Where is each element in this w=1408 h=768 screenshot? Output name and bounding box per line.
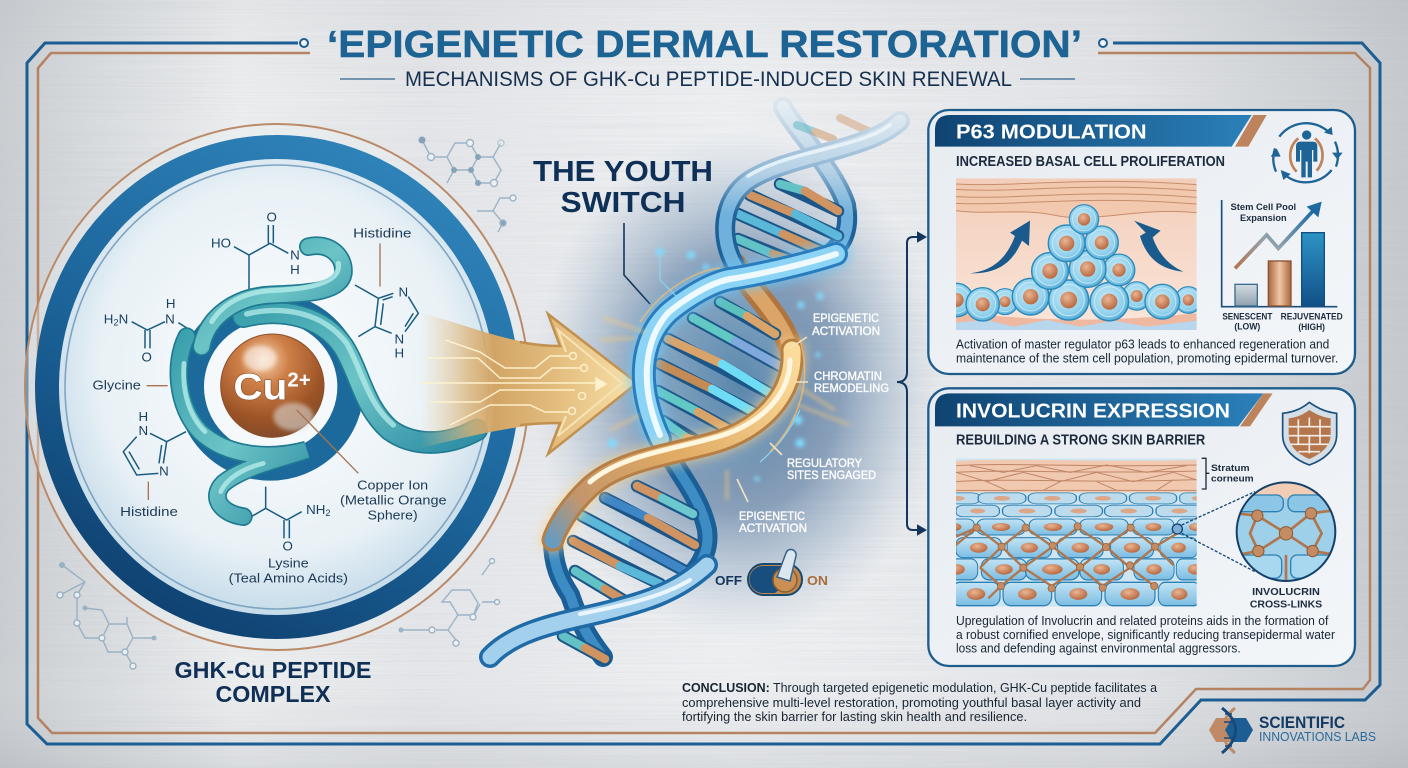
blue ring (47, 147, 507, 627)
bar chart: stem cell pool expansion: Stem Cell Pool (1230, 202, 1296, 212)
bar chart: stem cell pool expansion (1222, 200, 1343, 332)
amino acid labels: Glycine (92, 378, 141, 393)
magnified cross-link view: CROSS-LINKS (1250, 599, 1322, 610)
callout line (624, 223, 650, 304)
teal ribbons (179, 246, 477, 517)
logo: scientific innovations labs: INNOVATIONS LABS (1259, 729, 1376, 744)
conclusion (682, 680, 1158, 724)
amino acid labels: (Metallic Orange (340, 493, 447, 508)
conclusion: fortifying the skin barrier for lasting skin health and resilience. (682, 709, 1027, 724)
panel: involucrin expression (928, 388, 1355, 666)
amino acid labels: Sphere) (368, 507, 418, 522)
icon: off/on toggle switch: ON (807, 573, 828, 588)
amino acid labels: (Teal Amino Acids) (229, 571, 348, 586)
activation labels: ACTIVATION (739, 523, 807, 535)
bonds (123, 225, 418, 538)
energy sparks and dots (600, 248, 850, 500)
illustration: basal cell proliferation (940, 178, 1202, 330)
chemical labels: 2 (325, 508, 331, 518)
activation labels: CHROMATIN (814, 371, 882, 383)
icon: brick shield (1283, 402, 1337, 465)
description: maintenance of the stem cell population, promoting epidermal turnover. (956, 350, 1338, 365)
magnified cross-link view (1182, 482, 1337, 610)
arrow: bracket to panels (897, 233, 925, 534)
chemical labels: H (166, 296, 175, 311)
heading: the youth switch: THE YOUTH (533, 156, 713, 188)
description: Upregulation of Involucrin and related proteins aids in the formation of (956, 613, 1329, 628)
activation labels: REMODELING (814, 383, 889, 395)
amino acid labels: Lysine (268, 556, 309, 571)
chemical labels: N (165, 311, 175, 326)
callout leader lines (147, 243, 380, 500)
copper ion sphere: 2+ (287, 369, 311, 392)
chemical labels: O (141, 350, 152, 365)
subheading: INCREASED BASAL CELL PROLIFERATION (956, 154, 1225, 170)
activation labels (737, 313, 889, 535)
chemical labels (104, 209, 408, 554)
panel: P63 modulation (928, 110, 1355, 374)
amino acid labels: Histidine (353, 226, 411, 241)
activation labels: EPIGENETIC (813, 313, 879, 325)
chemical labels: N (119, 311, 128, 326)
activation labels: ACTIVATION (812, 326, 880, 338)
icon: stem cell cycle person (1271, 123, 1343, 182)
description (956, 613, 1336, 655)
chemical labels: 2 (113, 317, 119, 327)
blue halo behind DNA (533, 130, 943, 640)
amino acid labels: Histidine (120, 504, 178, 519)
growth arrows (970, 221, 1183, 273)
illustration: skin barrier layers (956, 458, 1197, 606)
chemical labels: O (282, 539, 293, 554)
decorative molecule networks (57, 136, 516, 669)
bar chart: stem cell pool expansion: (HIGH) (1298, 322, 1325, 332)
header: P63 MODULATION (956, 121, 1147, 143)
back strands (553, 107, 847, 657)
chemical labels: H (290, 262, 300, 277)
heading: the youth switch: SWITCH (560, 187, 686, 219)
activation labels: EPIGENETIC (739, 511, 805, 523)
copper arc around the circle (25, 124, 529, 650)
copper ion sphere: Cu (233, 365, 287, 407)
base pairs (563, 118, 883, 659)
header: INVOLUCRIN EXPRESSION (956, 400, 1230, 422)
peptide ribbon ring (190, 307, 350, 467)
icon: off/on toggle switch (715, 549, 828, 595)
chemical labels: N (395, 331, 404, 346)
heading: GHK-Cu peptide complex: COMPLEX (216, 681, 331, 707)
stratum corneum label: Stratum (1211, 463, 1250, 473)
heading: the youth switch (533, 156, 713, 219)
conclusion: CONCLUSION: Through targeted epigenetic modulation, GHK-Cu peptide facilitates a (682, 680, 1158, 695)
description: a robust cornified envelope, significantly reducing transepidermal water (956, 627, 1336, 642)
logo: scientific innovations labs: SCIENTIFIC (1259, 714, 1345, 732)
description (956, 336, 1338, 365)
activation labels: SITES ENGAGED (787, 470, 876, 482)
chemical labels: N (399, 285, 408, 300)
chemical labels: N (159, 464, 169, 479)
DNA double helix (490, 107, 900, 659)
activation labels: REGULATORY (787, 458, 862, 470)
title: ‘EPIGENETIC DERMAL RESTORATION’ (327, 24, 1082, 66)
chemical labels: H (104, 311, 113, 326)
header (935, 393, 1273, 426)
bar chart: stem cell pool expansion: REJUVENATED (1281, 311, 1343, 321)
description: Activation of master regulator p63 leads to enhanced regeneration and (956, 336, 1329, 351)
involucrin cross-link network (956, 523, 1182, 598)
amino acid labels: Copper Ion (357, 477, 428, 492)
heading: GHK-Cu peptide complex (174, 657, 372, 707)
arrow: golden circuit arrow (420, 313, 637, 454)
amino acid labels (92, 226, 447, 586)
chemical labels: H (395, 346, 404, 361)
chemical labels: NH (306, 502, 325, 517)
stratum corneum label (1202, 458, 1254, 489)
front strands (490, 121, 900, 657)
bar chart: stem cell pool expansion: SENESCENT (1222, 311, 1273, 321)
heading: GHK-Cu peptide complex: GHK-Cu PEPTIDE (174, 657, 372, 683)
stem cells (940, 205, 1202, 321)
chemical labels: O (266, 209, 277, 224)
icon: off/on toggle switch: OFF (715, 573, 742, 588)
bar chart: stem cell pool expansion: Expansion (1240, 213, 1287, 223)
glow (630, 280, 800, 470)
subheading: REBUILDING A STRONG SKIN BARRIER (956, 432, 1206, 448)
bar chart: stem cell pool expansion: (LOW) (1234, 321, 1260, 331)
conclusion: comprehensive multi-level restoration, promoting youthful basal layer activity and (682, 695, 1141, 710)
subtitle: MECHANISMS OF GHK-Cu PEPTIDE-INDUCED SKIN RENEWAL (405, 68, 1012, 91)
stratum corneum label: corneum (1211, 474, 1254, 484)
chemical labels: H (139, 409, 148, 424)
molecular structure, reference coords x3 (92, 209, 477, 586)
chemical labels: HO (211, 235, 231, 250)
logo: scientific innovations labs (1209, 708, 1376, 753)
description: loss and defending against environmental aggressors. (956, 640, 1241, 655)
magnified cross-link view: INVOLUCRIN (1252, 587, 1320, 598)
panel: GHK-Cu peptide complex (25, 124, 529, 650)
copper ion sphere (221, 334, 324, 437)
chemical labels: N (290, 247, 300, 262)
header (935, 115, 1267, 147)
chemical labels: N (139, 423, 148, 438)
